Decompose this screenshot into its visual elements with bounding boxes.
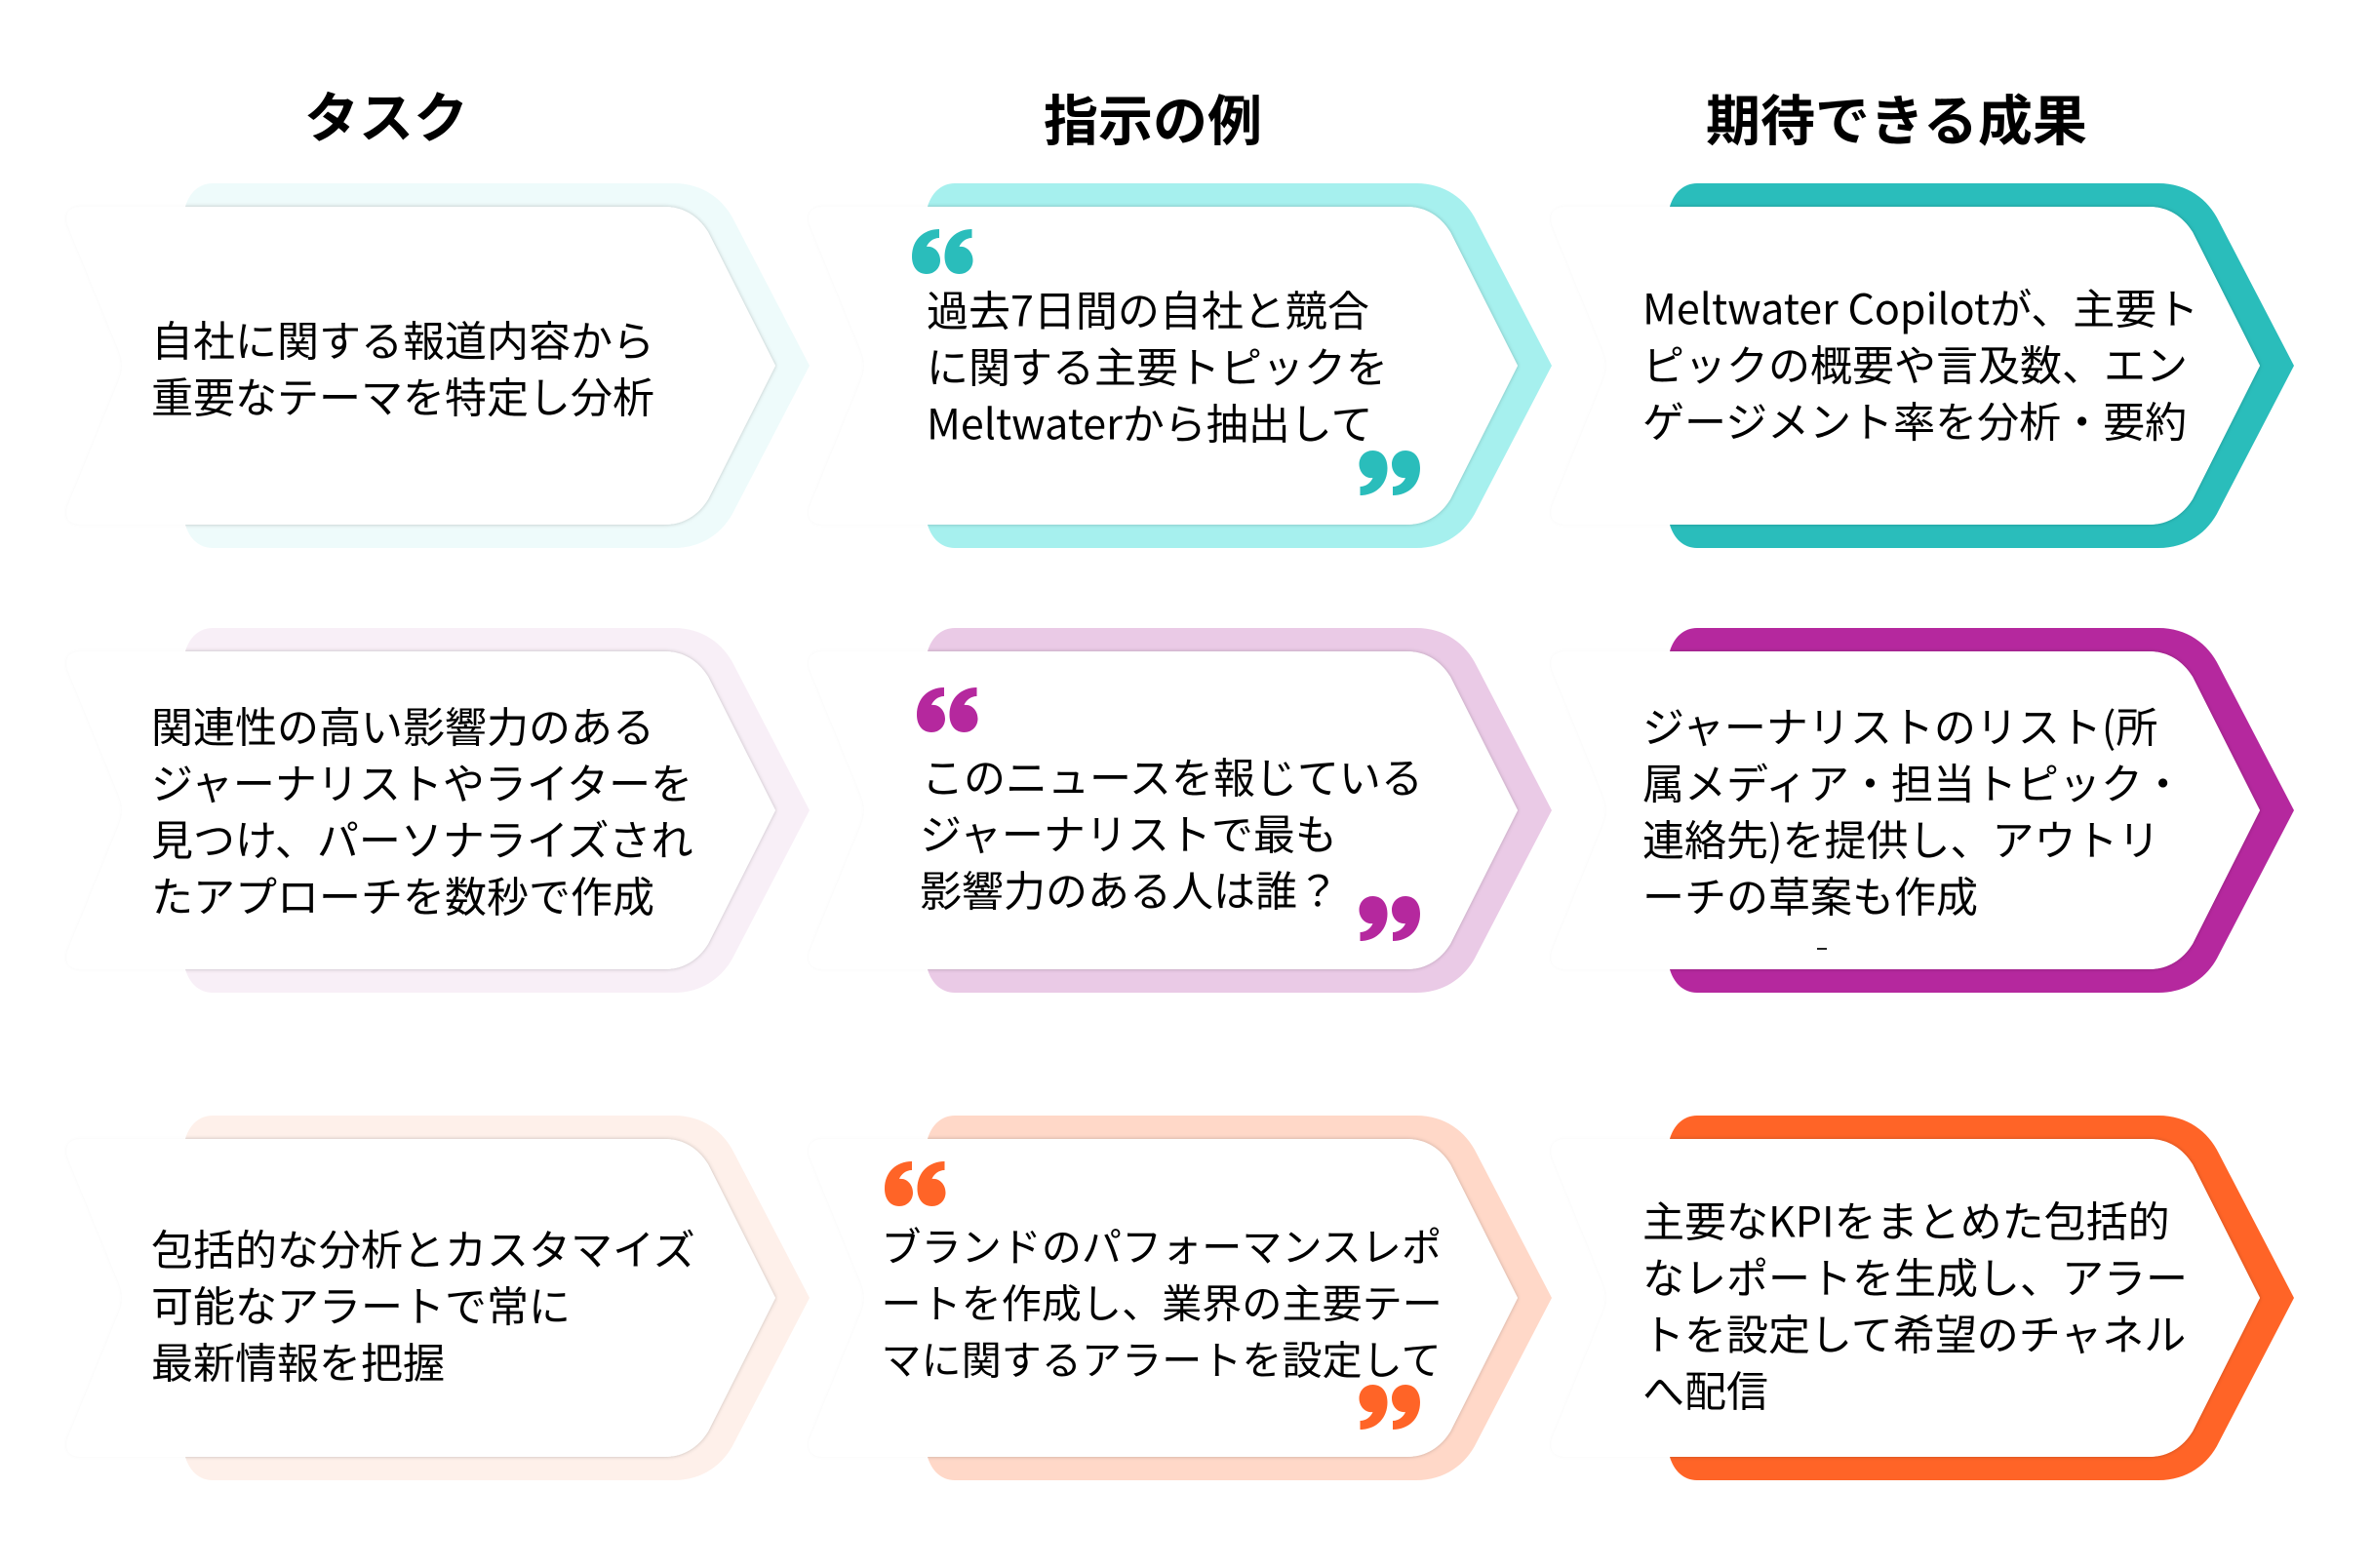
card: result row 2 [1643,628,2294,993]
card text: 自社に関する報道内容から [151,308,654,369]
card text: トを設定して希望のチャネル [1642,1303,2186,1363]
card text: ジャーナリストのリスト(所 [1642,694,2157,755]
chevron shape [928,1116,1552,1480]
card text: ートを作成し、業界の主要テー [882,1272,1443,1330]
card text: ブランドのパフォーマンスレポ [882,1215,1442,1274]
card text: ゲージメント率を分析・要約 [1642,390,2187,451]
chevron shape [1670,628,2294,993]
card text: 影響力のある人は誰？ [920,858,1339,919]
card text: ピックの概要や言及数、エン [1642,333,2188,394]
card text: 主要なKPIをまとめた包括的 [1642,1190,2170,1250]
heading: タスク: タスク [304,75,468,154]
stray mark [1817,948,1827,950]
chevron shape [185,628,810,993]
card text: たアプローチを数秒で作成 [151,864,654,924]
card text: Meltwaterから抽出して [927,392,1373,452]
icon: closing quote [1360,1385,1420,1430]
card text: へ配信 [1642,1359,1768,1420]
card text: ジャーナリストで最も [920,802,1337,862]
chevron border [185,183,810,548]
chevron body [66,207,775,525]
icon: closing quote [1360,451,1420,495]
card text: 関連性の高い影響力のある [151,694,654,755]
card text: マに関するアラートを設定して [882,1328,1442,1387]
card text: ジャーナリストやライターを [151,751,692,811]
card text: Meltwater Copilotが、主要ト [1642,277,2198,337]
card: task row 1 [153,183,810,548]
card text: ーチの草案も作成 [1642,864,1978,924]
card: task row 2 [152,628,810,993]
card: example row 1 [912,183,1552,548]
chevron shape [1670,1116,2294,1480]
card: task row 3 [152,1116,810,1480]
card text: 過去7日間の自社と競合 [927,279,1369,339]
card text: 属メディア・担当トピック・ [1642,751,2184,811]
card: example row 3 [885,1116,1552,1480]
chevron shape [928,628,1552,993]
heading: 期待できる成果: 期待できる成果 [1706,78,2087,157]
card text: このニュースを報じている [922,745,1423,805]
heading: 指示の例: 指示の例 [1044,78,1262,157]
icon: opening quote [885,1161,946,1206]
icon: opening quote [912,229,973,274]
chevron shape [185,1116,810,1480]
icon: opening quote [917,687,977,732]
card text: 最新情報を把握 [151,1330,445,1391]
icon: closing quote [1360,896,1420,941]
chevron shape [928,183,1552,548]
card: example row 2 [917,628,1552,993]
card: result row 3 [1644,1116,2294,1480]
card: result row 1 [1644,183,2294,548]
card text: 見つけ、パーソナライズされ [151,807,693,868]
card text: 包括的な分析とカスタマイズ [151,1217,695,1277]
card text: 可能なアラートで常に [151,1274,571,1334]
card text: なレポートを生成し、アラー [1642,1246,2188,1307]
chevron shape [1670,183,2294,548]
card text: 連絡先)を提供し、アウトリ [1642,807,2160,868]
card text: に関する主要トピックを [927,335,1388,396]
card text: 重要なテーマを特定し分析 [151,365,654,425]
